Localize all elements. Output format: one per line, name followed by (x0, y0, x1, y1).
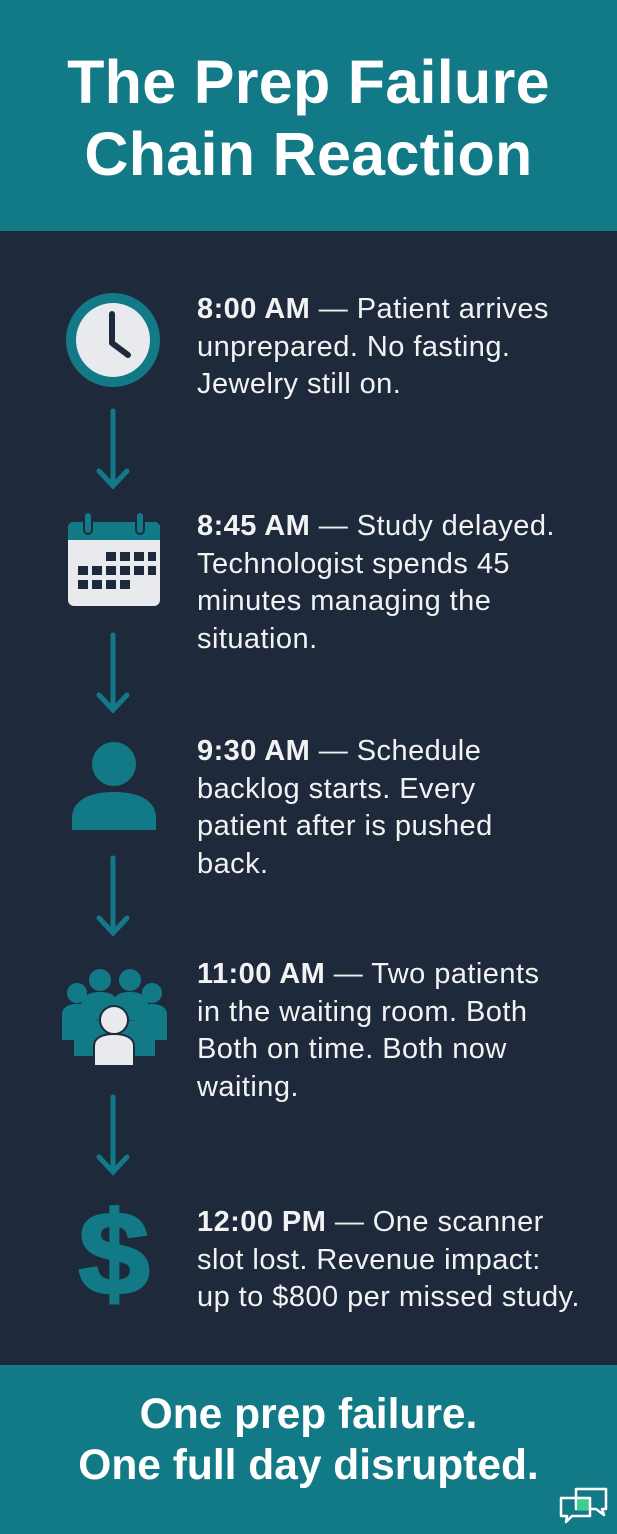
text: 8:45 AM: situation. (197, 622, 318, 654)
text: 11:00 AM: waiting. (197, 1070, 299, 1102)
footer text: One prep failure. (140, 1391, 477, 1438)
title: Chain Reaction (84, 120, 533, 188)
text: 11:00 AM (197, 958, 539, 1102)
text: 8:00 AM (197, 293, 549, 400)
text: 9:30 AM: back. (197, 848, 269, 880)
text: 8:45 AM: 8:45 AM — Study delayed. (197, 510, 555, 542)
text: 12:00 PM: slot lost. Revenue impact: (197, 1244, 541, 1276)
text: 11:00 AM: Both on time. Both now (197, 1033, 507, 1065)
footer text: One full day disrupted. (78, 1442, 539, 1489)
title: The Prep Failure (67, 48, 550, 116)
text: 9:30 AM (197, 735, 493, 880)
text: 8:45 AM: minutes managing the (197, 585, 491, 617)
icon: person (72, 742, 156, 830)
text: 8:00 AM: unprepared. No fasting. (197, 330, 510, 362)
text: 9:30 AM: patient after is pushed (197, 810, 493, 842)
arrow 3 (96, 856, 130, 936)
text: 11:00 AM: in the waiting room. Both (197, 996, 527, 1028)
icon: calendar (68, 513, 160, 606)
text: 8:00 AM: Jewelry still on. (197, 368, 401, 400)
text: 11:00 AM: 11:00 AM — Two patients (197, 958, 539, 990)
icon: clock (66, 293, 160, 387)
footer band (0, 1365, 617, 1534)
text: 8:00 AM: 8:00 AM — Patient arrives (197, 293, 549, 325)
text: 12:00 PM: up to $800 per missed study. (197, 1281, 580, 1313)
text: 8:45 AM (197, 510, 555, 654)
text: 9:30 AM: 9:30 AM — Schedule (197, 735, 481, 767)
text: 12:00 PM: 12:00 PM — One scanner (197, 1206, 544, 1238)
arrow 1 (96, 408, 130, 490)
icon: chat bubbles (560, 1488, 608, 1524)
text: 12:00 PM (197, 1206, 580, 1313)
arrow 4 (96, 1094, 130, 1176)
text: 9:30 AM: backlog starts. Every (197, 772, 476, 804)
icon: group of people (62, 969, 167, 1065)
text: 8:45 AM: Technologist spends 45 (197, 548, 510, 580)
arrow 2 (96, 632, 130, 714)
title (67, 48, 550, 188)
footer text (78, 1391, 539, 1489)
header band (0, 0, 617, 231)
